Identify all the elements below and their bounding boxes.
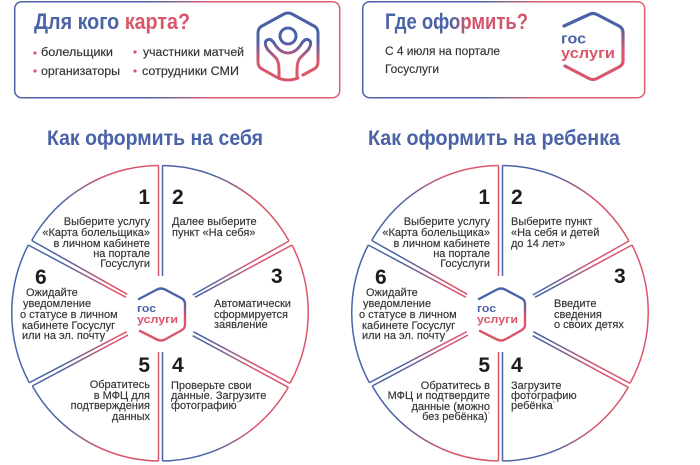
step 6: Ожидайте [26, 287, 78, 299]
step 3: Автоматически [214, 298, 291, 310]
step 4: * [237, 401, 240, 407]
step 1: в личном кабинете [394, 238, 490, 250]
list: audience: сотрудники СМИ [142, 66, 239, 78]
logo: gosuslugi center: услуги [137, 314, 178, 326]
step 4: фотографию [171, 400, 237, 412]
text: where to apply: С 4 июля на портале [385, 46, 500, 58]
logo: gosuslugi large: гос [561, 30, 586, 48]
step 3: сведения [554, 309, 602, 321]
step 4: ребёнка [511, 400, 553, 412]
step 5: * [488, 412, 491, 418]
list: audience: болельщики [41, 47, 113, 59]
step 6: или на эл. почту [22, 330, 106, 342]
step 6 [359, 266, 457, 342]
chart: steps wheel for yourself [12, 166, 308, 461]
step 5: 5 [138, 354, 150, 377]
step 5 [71, 354, 150, 423]
step 6 [20, 266, 118, 342]
step 5: данных [112, 411, 150, 423]
step 2: до 14 лет» [511, 238, 565, 250]
text: where to apply: Госуслуги [385, 64, 439, 76]
step 6: уведомление [363, 298, 431, 310]
step 4: 4 [172, 354, 184, 377]
heading: where to apply: Где оформить? [385, 9, 528, 34]
logo: gosuslugi center: гос [137, 303, 156, 315]
step 4: Проверьте свои [171, 380, 252, 392]
step 1: Госуслуги [440, 258, 490, 270]
step 5: подтверждения [71, 400, 150, 412]
step 5: без ребёнка) [422, 411, 488, 423]
heading: for whom: Для кого карта? [34, 9, 190, 34]
logo: gosuslugi center [137, 288, 185, 340]
step 4: * [553, 401, 556, 407]
logo: gosuslugi center: гос [477, 303, 496, 315]
icon: person in hexagon [258, 13, 318, 80]
chart: steps wheel for child [352, 166, 648, 461]
wheel outline and spokes [12, 166, 308, 461]
heading: apply for yourself: Как оформить на себя [47, 126, 263, 150]
step 6: о статусе в личном [20, 309, 118, 321]
step 1 [42, 186, 150, 270]
step 2 [172, 186, 257, 239]
step 6: 6 [375, 266, 387, 289]
step 4 [171, 354, 266, 412]
logo: gosuslugi large: услуги [561, 45, 615, 62]
step 1: 1 [478, 186, 490, 209]
step 1: Выберите услугу [404, 216, 490, 228]
panel: for whom card [15, 2, 340, 98]
logo: gosuslugi center [477, 288, 525, 340]
step 5: 5 [478, 354, 490, 377]
list: audience [33, 47, 244, 78]
step 6: Ожидайте [366, 287, 418, 299]
step 3 [554, 265, 626, 331]
step 3: заявление [214, 319, 268, 331]
text: where to apply [385, 46, 500, 76]
step 4: Загрузите [511, 380, 562, 392]
step 2 [511, 186, 599, 250]
step 1: «Карта болельщика» [42, 227, 150, 239]
step 2: 2 [172, 186, 184, 209]
step 4: данные. Загрузите [171, 390, 266, 402]
step 3: сформируется [214, 309, 288, 321]
step 5: МФЦ и подтвердите [388, 390, 490, 402]
step 1: 1 [138, 186, 150, 209]
step 4 [511, 354, 577, 412]
step 3: Введите [554, 298, 597, 310]
step 2: пункт «На себя» [172, 227, 255, 239]
step 2: Далее выберите [172, 216, 257, 228]
step 5: в МФЦ для [94, 390, 150, 402]
step 6: кабинете Госуслуг [362, 320, 455, 332]
step 2: 2 [511, 186, 523, 209]
step 2: Выберите пункт [511, 216, 592, 228]
step 3 [214, 265, 291, 331]
step 6: кабинете Госуслуг [22, 320, 115, 332]
step 4: фотографию [511, 390, 577, 402]
step 1: в личном кабинете [54, 238, 150, 250]
step 6: уведомление [23, 298, 91, 310]
logo: gosuslugi center: услуги [477, 314, 518, 326]
step 1: на портале [93, 248, 150, 260]
step 1: Госуслуги [100, 258, 150, 270]
step 1 [382, 186, 490, 270]
step 3: 3 [271, 265, 283, 288]
step 3: 3 [614, 265, 626, 288]
list: audience: участники матчей [143, 47, 244, 59]
step 2: «На себя и детей [511, 227, 599, 239]
step 5: Обратитесь в [421, 380, 490, 392]
step 5: Обратитесь [90, 379, 150, 391]
panel: where to apply card [363, 2, 645, 98]
step 1: «Карта болельщика» [382, 227, 490, 239]
step 3: о своих детях [554, 319, 624, 331]
list: audience: организаторы [41, 66, 120, 78]
heading: apply for child: Как оформить на ребенка [368, 126, 621, 150]
step 1: Выберите услугу [64, 216, 150, 228]
step 5: данные (можно [411, 401, 490, 413]
step 5 [388, 354, 491, 423]
step 6: 6 [35, 266, 47, 289]
step 6: о статусе в личном [359, 309, 457, 321]
wheel outline and spokes [352, 166, 648, 461]
logo: gosuslugi large [561, 14, 623, 80]
step 6: или на эл. почту [362, 330, 446, 342]
step 4: 4 [511, 354, 523, 377]
step 1: на портале [433, 248, 490, 260]
